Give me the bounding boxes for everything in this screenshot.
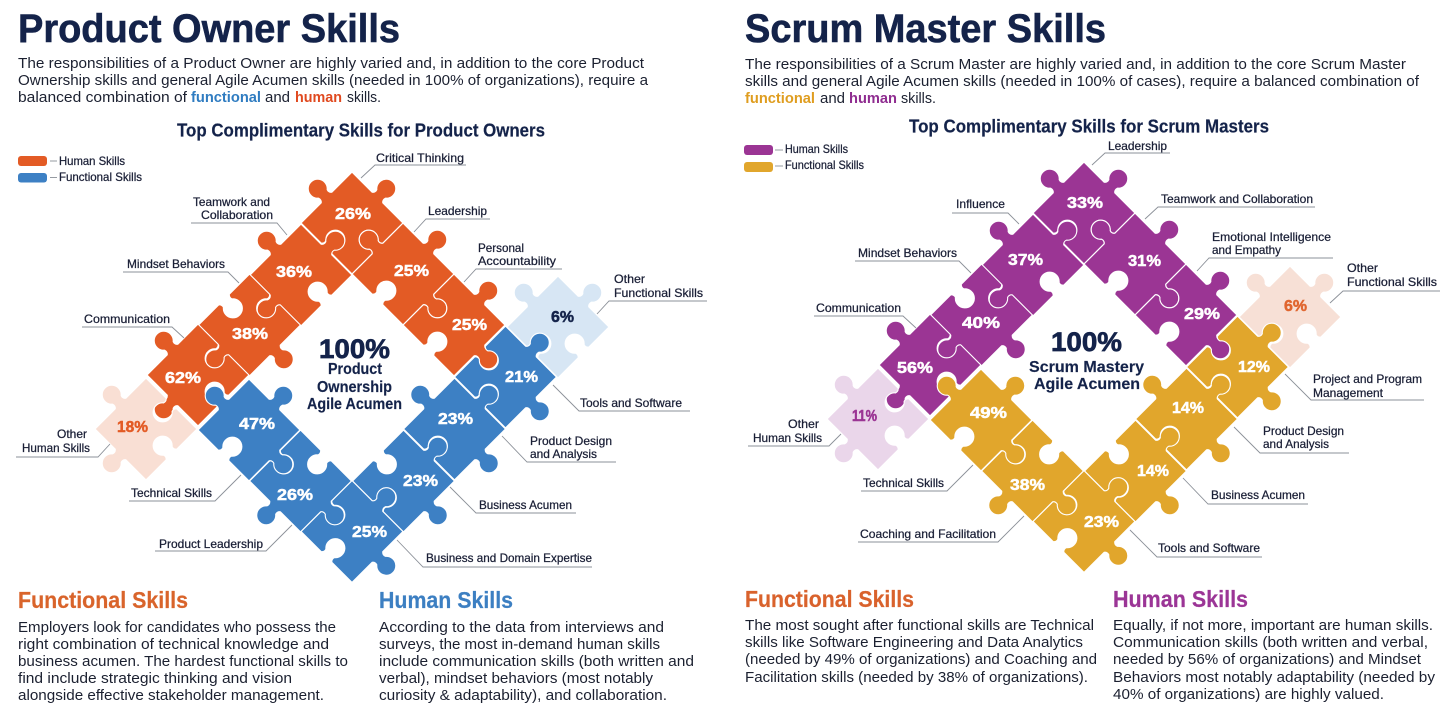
label: business acumen: Business Acumen (479, 498, 572, 512)
centre label: product ownership agile acumen (307, 334, 402, 413)
label: tools and software (1130, 530, 1262, 557)
piece: product leadership 26%: 26% (277, 487, 313, 504)
label: critical thinking: Critical Thinking (376, 151, 464, 165)
legend: scrum masters: Functional Skills (785, 158, 864, 172)
piece: mindset behaviors 38% (183, 274, 316, 407)
intro text: product owner: balanced combination of (18, 89, 188, 106)
piece: technical skills 47% (183, 348, 331, 496)
label: emotional intelligence and empathy: Emotional Intelligence (1212, 230, 1331, 244)
intro text: product owner: The responsibilities of a Product Owner are highly varied and, in addition to the core Product (18, 55, 645, 72)
text block: functional skills (scrum master): skills like Software Engineering and Data Analytics (745, 634, 1083, 651)
text block: human skills (product owner): verbal), mindset behaviors (most notably (379, 670, 653, 687)
label: product leadership: Product Leadership (159, 537, 263, 551)
label: other human skills: Other (57, 427, 87, 441)
text block: human skills (product owner): According to the data from interviews and (379, 619, 664, 636)
piece: product leadership 26% (234, 430, 367, 563)
piece: project and program management 12% (1187, 301, 1319, 433)
piece: product design and analysis 14%: 14% (1172, 400, 1204, 417)
label: leadership: Leadership (1108, 139, 1167, 153)
text block: human skills (product owner) (379, 619, 694, 704)
piece: communication 62%: 62% (165, 370, 201, 387)
label: product design and analysis: and Analysis (530, 447, 597, 461)
piece: mindset behaviors 40% (915, 264, 1048, 397)
centre label: product ownership agile acumen: 100% (319, 334, 390, 364)
label: other functional skills: Functional Skills (614, 286, 703, 300)
text block: functional skills (product owner): Employers look for candidates who possess the (18, 619, 336, 636)
piece: teamwork and collaboration 36%: 36% (276, 264, 312, 281)
legend: scrum masters (744, 142, 864, 172)
piece: critical thinking 26% (286, 141, 418, 274)
label: tools and software: Tools and Software (580, 396, 682, 410)
label: teamwork and collaboration: Teamwork and (193, 195, 270, 209)
piece: tools and software 21% (455, 311, 587, 443)
text block: functional skills (scrum master): The most sought after functional skills are Technical (745, 617, 1094, 634)
piece: business acumen 23% (353, 415, 485, 547)
piece: leadership 25%: 25% (394, 263, 429, 280)
piece: emotional intelligence and empathy 29% (1135, 249, 1268, 381)
centre label: product ownership agile acumen: Ownership (317, 379, 392, 396)
label: personal accountability: Personal (478, 241, 524, 255)
label: influence (952, 197, 1019, 224)
label: teamwork and collaboration (191, 195, 287, 235)
piece: product design and analysis 14% (1120, 337, 1268, 485)
intro text: product owner (18, 55, 649, 106)
label: other human skills (16, 427, 110, 457)
puzzle chart: product owner skills (16, 141, 707, 598)
label: communication (82, 312, 184, 338)
centre label: scrum mastery agile acumen: Agile Acumen (1034, 376, 1140, 393)
panel: scrum master skills (744, 7, 1440, 703)
label: product design and analysis: and Analysis (1263, 437, 1329, 451)
piece: business acumen 14% (1085, 405, 1217, 537)
piece: tools and software 23%: 23% (1084, 514, 1119, 531)
label: product design and analysis (1234, 424, 1349, 453)
piece: teamwork and collaboration 31% (1069, 182, 1217, 330)
piece: leadership 33% (1018, 131, 1150, 264)
label: business acumen: Business Acumen (1211, 488, 1305, 502)
piece: communication 56% (848, 299, 981, 431)
text block: human skills (scrum master): needed by 56% of organizations) and Mindset (1113, 651, 1422, 668)
text block: human skills (product owner): surveys, the most in-demand human skills (379, 636, 660, 653)
heading: functional skills (scrum master): Functional Skills (745, 586, 914, 612)
label: leadership (1092, 139, 1170, 165)
intro text: scrum master: skills and general Agile Acumen skills (needed in 100% of cases), require a balanced combination of (745, 73, 1420, 90)
text block: functional skills (product owner): business acumen. The hardest functional skills to (18, 653, 348, 670)
text block: functional skills (product owner): alongside effective stakeholder management. (18, 687, 324, 704)
centre label: scrum mastery agile acumen: Scrum Mastery (1029, 359, 1144, 376)
label: business and domain expertise (397, 540, 592, 567)
label: teamwork and collaboration: Collaboration (201, 208, 273, 222)
label: project and program management (1285, 372, 1424, 400)
label: mindset behaviors (123, 257, 239, 283)
text block: human skills (scrum master): Behaviors most notably adaptability (needed by (1113, 669, 1435, 686)
label: emotional intelligence and empathy: and Empathy (1212, 243, 1281, 257)
label: product design and analysis (502, 434, 616, 462)
label: product leadership (155, 525, 292, 551)
intro text: product owner: skills. (347, 89, 381, 106)
piece: technical skills 47%: 47% (239, 416, 275, 433)
text block: functional skills (scrum master): (needed by 49% of organizations) and Coaching and (745, 651, 1097, 668)
label: communication (814, 301, 916, 328)
intro text: scrum master: functional (745, 90, 815, 107)
label: coaching and facilitation (858, 516, 1024, 542)
panel: product owner skills (16, 7, 707, 704)
centre label: product ownership agile acumen: Product (328, 361, 382, 378)
piece: teamwork and collaboration 36% (219, 193, 367, 341)
piece: emotional intelligence and empathy 29%: 29% (1184, 306, 1220, 323)
label: teamwork and collaboration (1145, 192, 1315, 219)
text block: human skills (product owner): curiosity & adaptability), and collaboration. (379, 687, 667, 704)
heading: functional skills (product owner): Functional Skills (18, 587, 188, 613)
label: communication: Communication (816, 301, 901, 315)
legend: product owners: Functional Skills (59, 170, 142, 184)
label: mindset behaviors: Mindset Behaviors (127, 257, 225, 271)
label: leadership (414, 204, 490, 232)
piece: other functional skills 6% (492, 245, 624, 378)
piece: business and domain expertise 25% (301, 465, 434, 598)
intro text: scrum master: skills. (901, 90, 936, 107)
label: critical thinking (361, 151, 466, 178)
piece: other human skills 18%: 18% (117, 419, 148, 436)
intro text: scrum master: The responsibilities of a Scrum Master are highly varied and, in addition to the core Scrum Master (745, 56, 1406, 73)
piece: teamwork and collaboration 31%: 31% (1128, 253, 1161, 270)
text block: human skills (scrum master): Communication skills (both written and verbal, (1113, 634, 1428, 651)
label: other functional skills: Other (1347, 261, 1378, 275)
piece: other functional skills 6%: 6% (551, 309, 574, 326)
centre label: scrum mastery agile acumen: 100% (1051, 327, 1122, 357)
piece: critical thinking 26%: 26% (335, 206, 371, 223)
label: technical skills: Technical Skills (863, 476, 944, 490)
piece: leadership 33%: 33% (1067, 195, 1103, 212)
label: technical skills: Technical Skills (131, 486, 212, 500)
piece: influence 37% (951, 183, 1099, 331)
label: personal accountability (464, 241, 562, 282)
centre label: scrum mastery agile acumen (1029, 327, 1144, 393)
chart heading: product owners: Top Complimentary Skills for Product Owners (177, 120, 545, 140)
piece: business acumen 23%: 23% (403, 473, 438, 490)
label: coaching and facilitation: Coaching and Facilitation (860, 527, 996, 541)
label: leadership: Leadership (428, 204, 487, 218)
text block: functional skills (scrum master) (745, 617, 1097, 686)
label: business acumen (450, 487, 576, 513)
piece: coaching and facilitation 38% (966, 420, 1099, 553)
label: mindset behaviors: Mindset Behaviors (858, 246, 957, 260)
piece: project and program management 12%: 12% (1238, 359, 1270, 376)
text block: human skills (scrum master): Equally, if not more, important are human skills. (1113, 617, 1433, 634)
intro text: product owner: functional (191, 89, 261, 106)
label: other human skills (748, 417, 841, 446)
intro text: product owner: Ownership skills and general Agile Acumen skills (needed in 100% of organizations), require a (18, 72, 649, 89)
label: other functional skills: Other (614, 272, 645, 286)
piece: influence 37%: 37% (1008, 252, 1043, 269)
piece: mindset behaviors 38%: 38% (232, 326, 268, 343)
label: other human skills: Human Skills (753, 431, 822, 445)
label: other human skills: Human Skills (22, 441, 90, 455)
piece: communication 56%: 56% (897, 360, 933, 377)
piece: technical skills 49% (915, 338, 1063, 486)
heading: human skills (scrum master): Human Skills (1113, 586, 1248, 612)
piece: technical skills 49%: 49% (970, 405, 1007, 422)
piece: other functional skills 6%: 6% (1284, 298, 1307, 315)
label: other functional skills: Functional Skills (1347, 275, 1437, 289)
text block: functional skills (product owner) (18, 619, 348, 704)
label: personal accountability: Accountability (478, 254, 556, 268)
text block: functional skills (product owner): right combination of technical knowledge and (18, 636, 329, 653)
title: product owner skills: Product Owner Skills (18, 7, 400, 51)
heading: human skills (product owner): Human Skills (379, 587, 513, 613)
piece: product design and analysis 23% (388, 347, 536, 495)
label: technical skills (129, 475, 241, 501)
text block: human skills (product owner): include communication skills (both written and (379, 653, 694, 670)
label: communication: Communication (84, 312, 170, 326)
text block: human skills (scrum master): 40% of organizations) are highly valued. (1113, 686, 1384, 703)
label: tools and software (553, 385, 690, 411)
label: technical skills (861, 465, 973, 491)
label: other human skills: Other (788, 417, 819, 431)
legend: product owners: Human Skills (59, 154, 125, 168)
piece: tools and software 23% (1033, 455, 1166, 588)
label: teamwork and collaboration: Teamwork and Collaboration (1161, 192, 1313, 206)
label: business acumen (1183, 478, 1308, 504)
piece: leadership 25% (337, 192, 485, 340)
piece: personal accountability 25% (403, 259, 536, 391)
piece: other human skills 11% (796, 353, 929, 485)
label: mindset behaviors (855, 246, 971, 273)
piece: tools and software 21%: 21% (505, 369, 538, 386)
piece: other functional skills 6% (1224, 235, 1356, 368)
piece: business and domain expertise 25%: 25% (352, 524, 387, 541)
piece: mindset behaviors 40%: 40% (962, 315, 1000, 332)
chart heading: scrum masters: Top Complimentary Skills for Scrum Masters (909, 116, 1269, 136)
label: emotional intelligence and empathy (1197, 230, 1333, 271)
label: business and domain expertise: Business and Domain Expertise (426, 551, 592, 565)
puzzle chart: scrum master skills (748, 131, 1440, 588)
piece: product design and analysis 23%: 23% (438, 411, 473, 428)
intro text: product owner: human (295, 89, 342, 106)
intro text: product owner: and (265, 89, 290, 106)
intro text: scrum master: and (820, 90, 845, 107)
piece: other human skills 18% (64, 363, 197, 495)
label: product design and analysis: Product Design (530, 434, 612, 448)
text block: human skills (scrum master) (1113, 617, 1435, 703)
label: other functional skills (1330, 261, 1440, 303)
text block: functional skills (scrum master): Facilitation skills (needed by 38% of organizations). (745, 669, 1088, 686)
label: project and program management: Project and Program (1313, 372, 1422, 386)
piece: communication 62% (116, 309, 249, 441)
piece: personal accountability 25%: 25% (452, 317, 487, 334)
legend: scrum masters: Human Skills (785, 142, 848, 156)
label: project and program management: Management (1313, 386, 1384, 400)
label: product design and analysis: Product Design (1263, 424, 1344, 438)
label: influence: Influence (956, 197, 1005, 211)
text block: functional skills (product owner): find include strategic thinking and vision (18, 670, 292, 687)
legend: product owners (18, 154, 142, 184)
label: tools and software: Tools and Software (1158, 541, 1260, 555)
intro text: scrum master (745, 56, 1420, 107)
intro text: scrum master: human (849, 90, 897, 107)
piece: business acumen 14%: 14% (1137, 463, 1169, 480)
piece: other human skills 11%: 11% (852, 408, 877, 425)
centre label: product ownership agile acumen: Agile Acumen (307, 396, 402, 413)
piece: coaching and facilitation 38%: 38% (1010, 477, 1045, 494)
title: scrum master skills: Scrum Master Skills (745, 7, 1106, 51)
label: other functional skills (597, 272, 707, 314)
